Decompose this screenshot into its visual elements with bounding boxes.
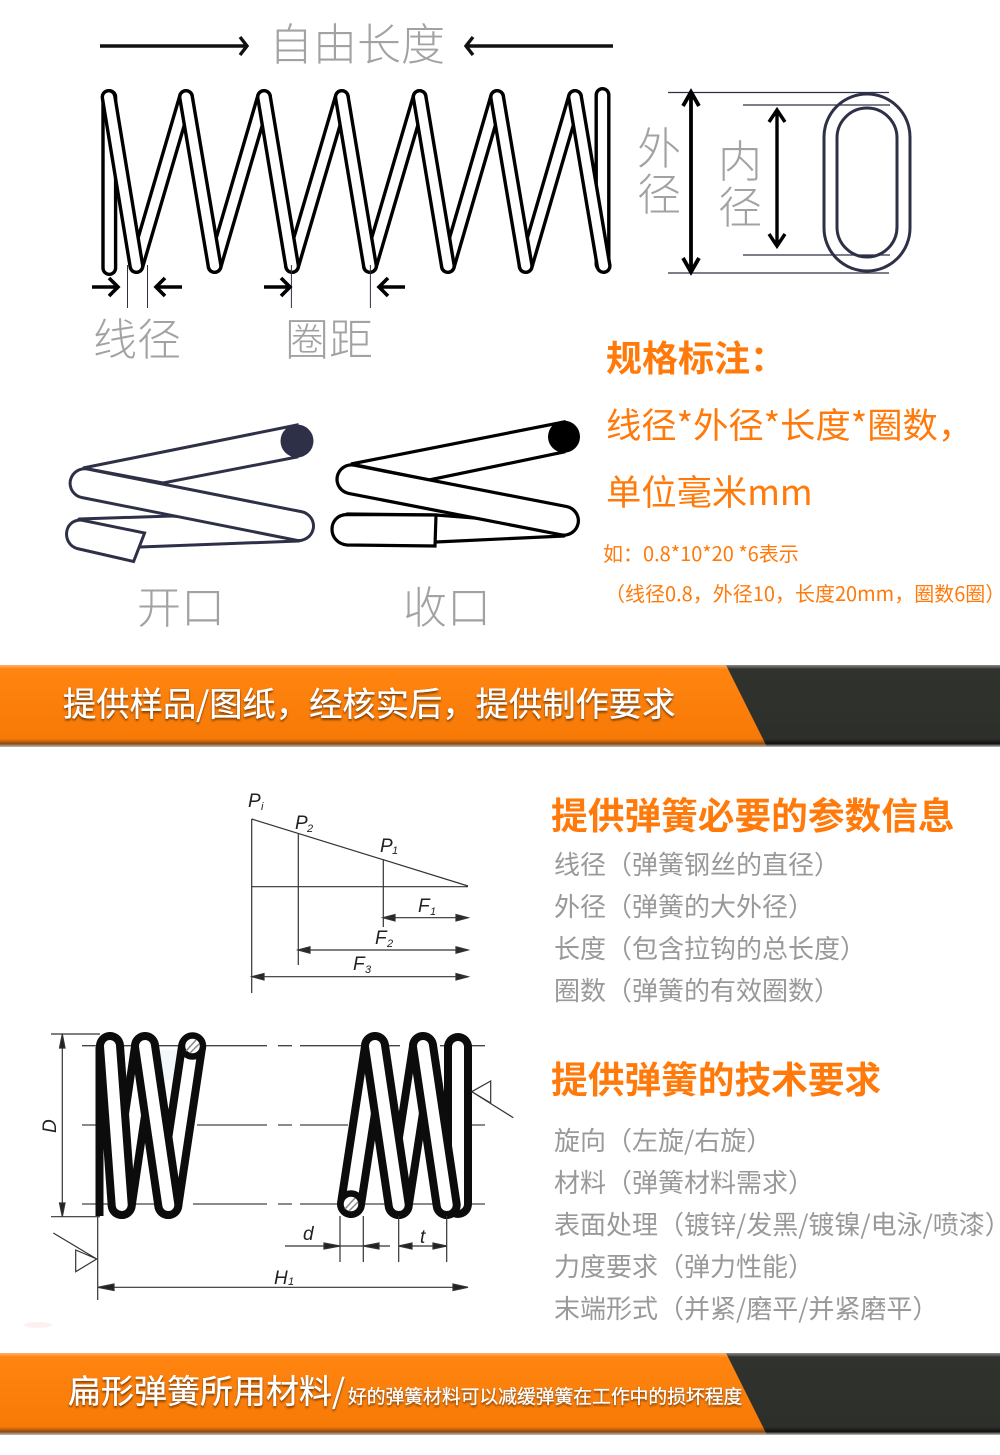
diagram: inner and outer diameter [668,88,912,276]
rear strands right [351,1047,423,1205]
dimension d and t [285,1216,447,1262]
labels [248,791,436,976]
item: wire diameter: 线径（弹簧钢丝的直径） [554,845,840,882]
labels: i [261,801,264,813]
item: end form: 末端形式（并紧/磨平/并紧磨平） [554,1289,938,1326]
labels: 1 [392,845,398,857]
dimension H [98,1216,468,1300]
wire section bottom [340,1194,362,1214]
spec format: 线径*外径*长度*圈数， [606,398,973,449]
chart: load deflection diagram [248,791,470,993]
dimension D [40,1034,100,1217]
dimension F1 [383,914,468,921]
end coil right [594,95,610,264]
item: direction: 旋向（左旋/右旋） [554,1121,772,1158]
item: length: 长度（包含拉钩的总长度） [554,929,866,966]
spec example explanation: （线径0.8，外径10，长度20mm，圈数6圈） [605,578,1000,607]
requirement list [554,1121,1000,1326]
banner text: 提供样品/图纸，经核实后，提供制作要求 [63,677,675,726]
end strand right [444,1047,472,1204]
spec example: 如：0.8*10*20 *6表示 [603,538,799,567]
dimension F3 [252,974,468,980]
dimension d and t: d [303,1224,315,1245]
labels: P [248,791,261,812]
section heading: technical requirements: 提供弹簧的技术要求 [551,1050,881,1104]
banner text: 扁形弹簧所用材料/好的弹簧材料可以减缓弹簧在工作中的损坏程度 [68,1365,742,1413]
ring: inner [837,108,897,257]
arrow: free length left [100,36,250,56]
label: open end: 开口 [137,572,225,636]
label: coil pitch: 圈距 [285,304,373,368]
diagram: open and closed spring ends [65,420,580,564]
wire section top [182,1036,203,1056]
labels: P [295,813,308,834]
heading: free length: 自由长度 [269,9,445,73]
banner: spring materials [0,1353,1000,1435]
dimension d and t: t [420,1227,426,1248]
labels: F [418,896,431,917]
front strands left [100,1046,168,1216]
front coil strands [109,97,604,266]
rear coil strands [136,97,575,266]
labels: 2 [306,823,313,835]
front strands right [375,1046,447,1205]
item: force: 力度要求（弹力性能） [554,1247,814,1284]
faint corner mark [24,1322,52,1328]
spec title: 规格标注： [606,330,786,382]
item: surface treatment: 表面处理（镀锌/发黑/镀镍/电泳/喷漆） [554,1205,1000,1242]
arrows: wire diameter [92,278,182,296]
item: coil count: 圈数（弹簧的有效圈数） [554,971,840,1008]
labels: P [380,836,393,857]
labels: 3 [365,964,372,976]
dimension F2 [298,947,468,953]
labels: F [353,954,366,975]
center lines [82,1046,485,1204]
surface mark left [53,1233,97,1272]
surface mark right [472,1081,513,1118]
labels: F [375,928,388,949]
dimension H: 1 [288,1276,294,1288]
label: closed end: 收口 [403,572,491,636]
arrows: coil pitch [264,278,405,296]
labels: 1 [430,906,436,918]
open end spring [67,424,314,562]
axes and load line [252,819,468,993]
dimension D: D [40,1119,61,1133]
banner background [0,665,1000,747]
label: inner diameter: 内径 [718,126,762,236]
dimension H: H [274,1268,288,1289]
banner background [0,1353,1000,1435]
label: wire diameter: 线径 [93,304,181,368]
closed end spring [332,421,580,546]
item: material: 材料（弹簧材料需求） [554,1163,814,1200]
ring: outer [824,94,910,271]
item: outer diameter: 外径（弹簧的大外径） [554,887,814,924]
banner: provide samples [0,665,1000,747]
dimension ticks [128,265,370,308]
parameter list [554,845,866,1008]
diagram: compression spring side view [92,87,612,308]
arrow: inner diameter [769,110,785,246]
arrow: free length right [464,36,613,56]
rear strands left [122,1047,192,1205]
arrow: outer diameter [683,92,699,272]
section heading: required parameters: 提供弹簧必要的参数信息 [551,786,955,840]
faint watermark tint [140,1050,200,1080]
labels: 2 [386,938,393,950]
spec unit: 单位毫米mm [606,465,813,516]
guide lines [668,92,890,273]
label: outer diameter: 外径 [637,113,681,223]
end coil left [101,97,117,268]
